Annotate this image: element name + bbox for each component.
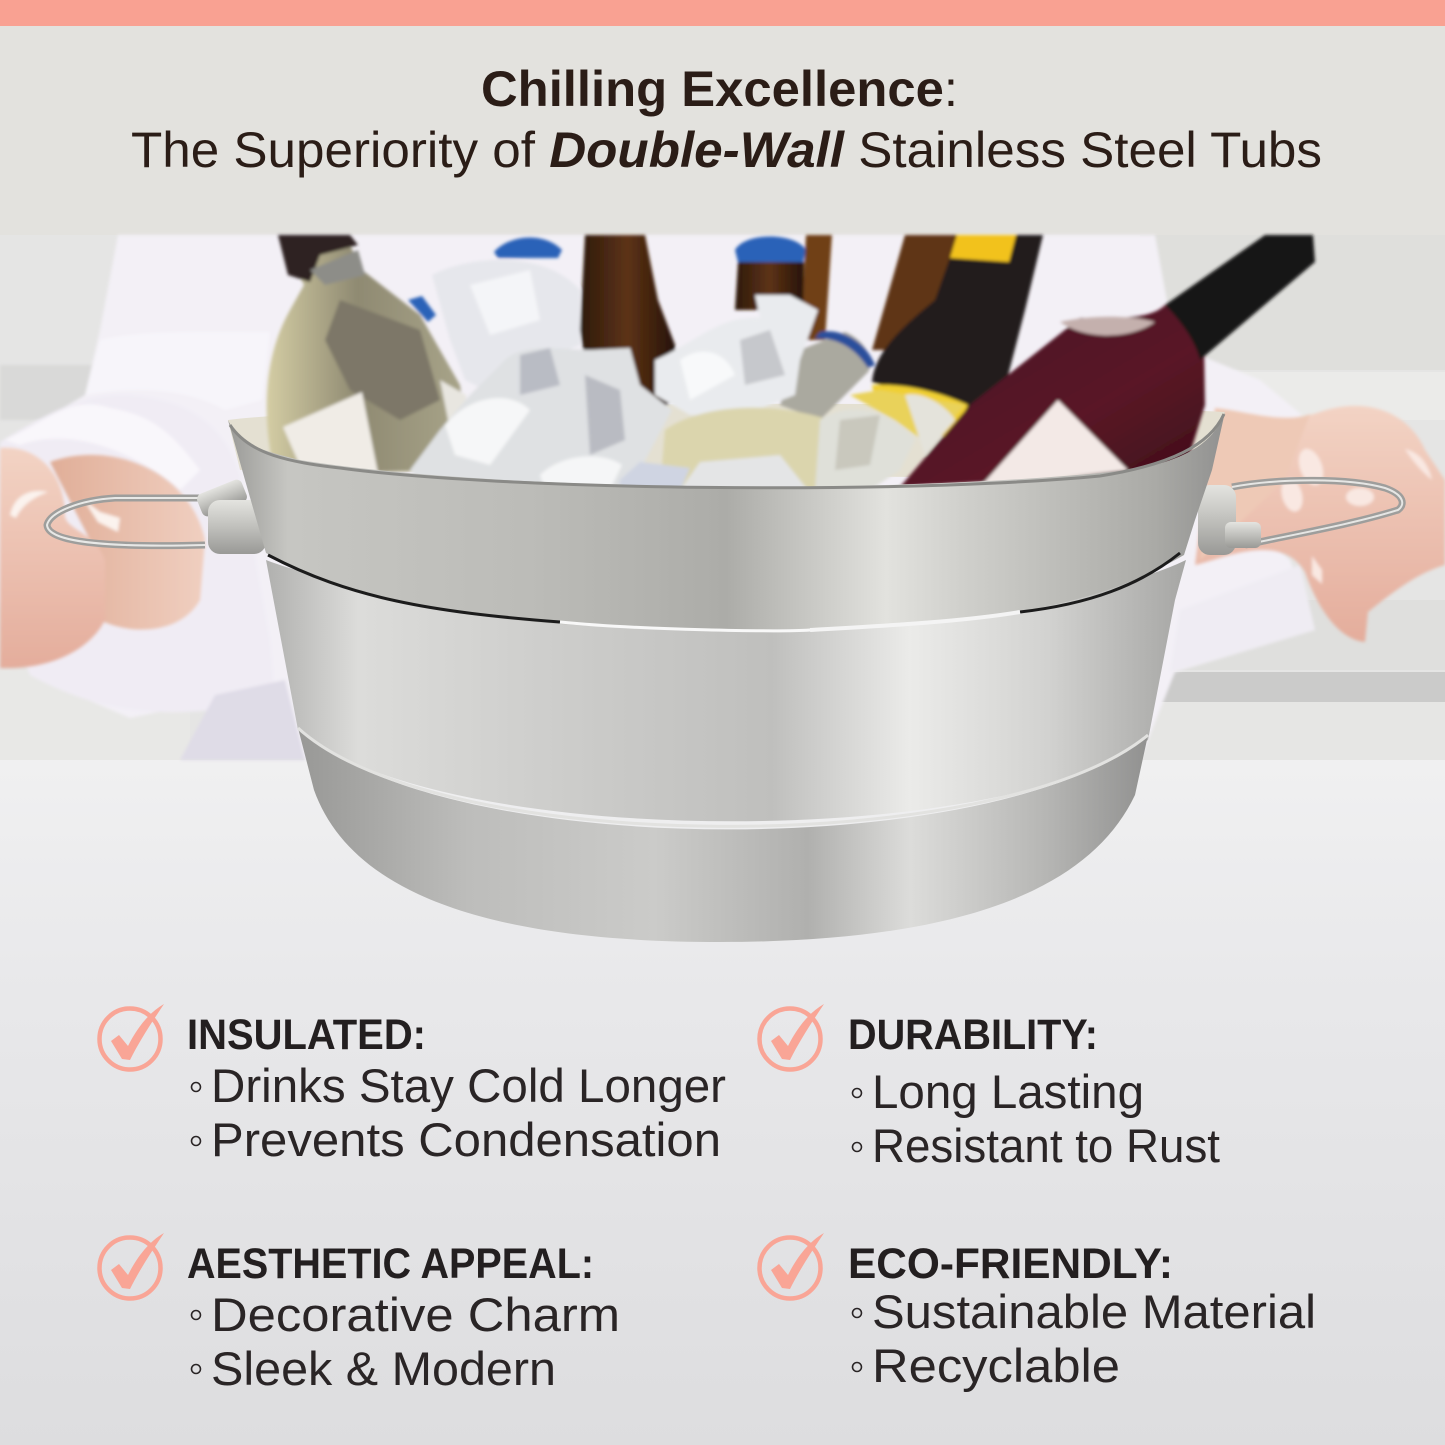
body: base section bbox=[298, 728, 1148, 942]
white wine bottle bbox=[267, 235, 468, 475]
bullets bbox=[852, 1065, 1220, 1172]
bullets bbox=[192, 1059, 726, 1166]
fingernails bbox=[10, 491, 120, 532]
bullets: Drinks Stay Cold Longer bbox=[211, 1059, 726, 1112]
ice pile bbox=[410, 260, 965, 491]
bullets: Sustainable Material bbox=[872, 1285, 1316, 1338]
heading: ECO-FRIENDLY: bbox=[848, 1240, 1173, 1288]
feature: eco-friendly bbox=[760, 1233, 1316, 1392]
bullets bbox=[852, 1285, 1316, 1392]
photo: white blouse bbox=[0, 235, 1315, 760]
icon: check bbox=[760, 1004, 824, 1070]
bullets: Decorative Charm bbox=[211, 1288, 620, 1341]
feature: aesthetic appeal bbox=[100, 1233, 620, 1395]
header panel bbox=[0, 26, 1445, 235]
bottles and ice bbox=[267, 235, 1315, 491]
brown bottle back bbox=[800, 235, 832, 340]
bullets: Prevents Condensation bbox=[211, 1113, 721, 1166]
photo: right arm and hand bbox=[1195, 406, 1445, 642]
counter surface bbox=[0, 760, 1445, 1445]
feature: durability bbox=[760, 1004, 1220, 1172]
photo: left arm and hand bbox=[0, 448, 205, 668]
amber bottle center bbox=[580, 235, 675, 420]
heading: AESTHETIC APPEAL: bbox=[187, 1240, 594, 1288]
band shadow line bbox=[268, 555, 560, 622]
title line 1: Chilling Excellence: bbox=[481, 61, 958, 117]
bottle neck grey bbox=[780, 332, 870, 420]
body: middle section bbox=[266, 560, 1186, 821]
feature: insulated bbox=[100, 1004, 726, 1166]
bullets: Recyclable bbox=[872, 1339, 1120, 1392]
icon: check bbox=[760, 1233, 824, 1298]
heading: INSULATED: bbox=[187, 1011, 426, 1059]
fingernails bbox=[1278, 445, 1432, 584]
bullets: Long Lasting bbox=[872, 1065, 1144, 1118]
tub interior bbox=[228, 404, 1225, 480]
rim highlight bbox=[230, 414, 1224, 488]
red wine bottle bbox=[900, 235, 1315, 487]
icon: beer caps bbox=[408, 236, 806, 322]
handle: left bbox=[47, 478, 266, 554]
title line 2: The Superiority of Double-Wall Stainless Steel Tubs bbox=[131, 122, 1322, 178]
handle: right bbox=[1198, 480, 1402, 555]
dark beer bottle bbox=[872, 235, 1043, 440]
heading: DURABILITY: bbox=[848, 1011, 1098, 1059]
tub bbox=[47, 412, 1402, 942]
upper band bbox=[228, 412, 1225, 630]
photo: kitchen background bbox=[0, 235, 1445, 760]
top accent band bbox=[0, 0, 1445, 26]
icon: check bbox=[100, 1233, 164, 1298]
bullets bbox=[192, 1288, 620, 1395]
bullets: Sleek & Modern bbox=[211, 1342, 556, 1395]
icon: check bbox=[100, 1004, 164, 1070]
bullets: Resistant to Rust bbox=[872, 1119, 1220, 1172]
